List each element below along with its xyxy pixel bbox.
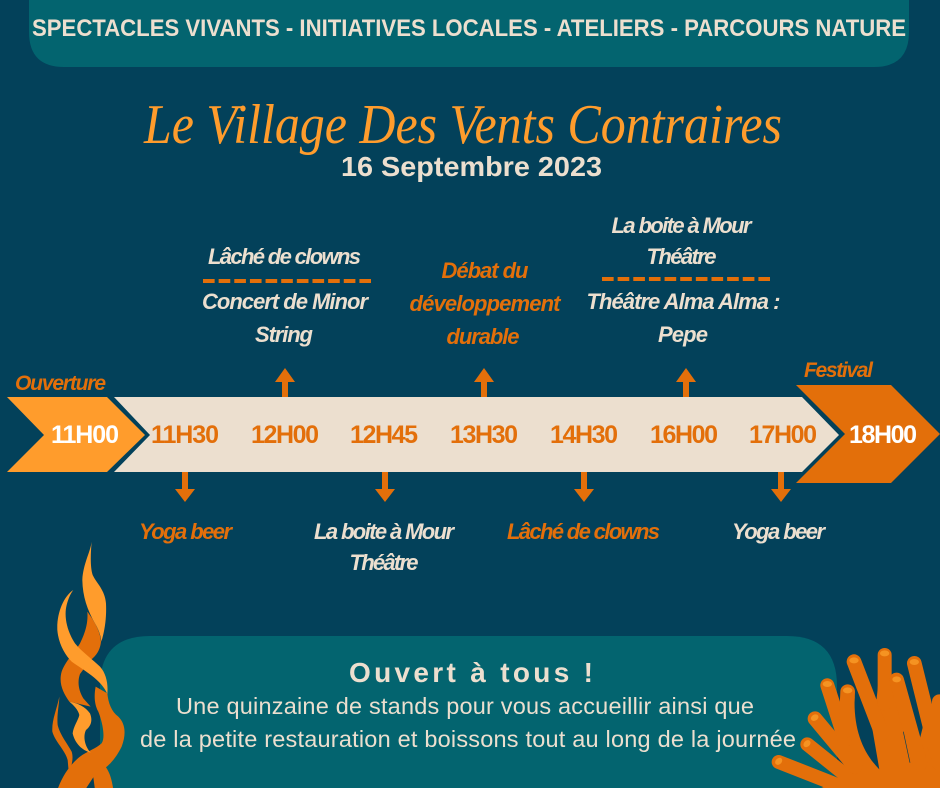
panel: open to all [100,636,837,788]
title: Le Village Des Vents Contraires [143,94,782,156]
icon: coral [774,650,940,788]
time labels: 13H30 [450,421,518,449]
event: 16H00: Théâtre Alma Alma : [586,289,780,314]
time labels: 12H00 [251,421,319,449]
top banner [29,0,909,67]
event: 12H45: Théâtre [350,550,418,575]
icon: seaweed [52,542,125,788]
start chevron: 11H00 [7,397,145,472]
event: 12H00: Concert de Minor [202,289,369,314]
label: Festival: Festival [804,359,874,382]
event: 14H30: Lâché de clowns [507,519,660,544]
panel text [140,693,796,752]
date: 16 Septembre 2023 [341,151,602,182]
event: 17H00: Yoga beer [732,519,826,544]
event: 12H00: Lâché de clowns [208,244,361,269]
start chevron: 11H00: 11H00 [51,421,119,449]
coral tips [774,650,919,766]
end chevron: 18H00 [796,385,940,483]
panel text: Une quinzaine de stands pour vous accueillir ainsi que [176,693,754,719]
event: 16H00: La boite à Mour [612,213,753,238]
event: 11H30: Yoga beer [139,519,233,544]
bar body [114,397,839,472]
end chevron: 18H00: 18H00 [849,421,917,449]
label: Ouverture: Ouverture [15,372,106,395]
event: 12H45 [314,519,455,575]
time labels: 14H30 [550,421,618,449]
time labels: 16H00 [650,421,718,449]
time labels: 11H30 [151,421,219,449]
arrows down [175,472,791,502]
event: 12H00: String [255,322,314,347]
panel heading: Ouvert à tous ! [349,657,593,688]
time labels: 17H00 [749,421,817,449]
time labels: 12H45 [350,421,418,449]
time labels [151,421,817,449]
event: 16H00: Théâtre [646,244,716,269]
event: 12H00 [202,244,371,347]
event: 13H30 [410,258,562,349]
timeline bar [7,385,940,483]
event: 12H45: La boite à Mour [314,519,455,544]
panel text: de la petite restauration et boissons tout au long de la journée [140,726,796,752]
event: 13H30: développement [410,291,562,316]
event: 16H00 [586,213,780,347]
event: 16H00: Pepe [658,322,708,347]
event: 13H30: Débat du [442,258,529,283]
event: 13H30: durable [446,324,520,349]
arrows up [275,368,696,397]
